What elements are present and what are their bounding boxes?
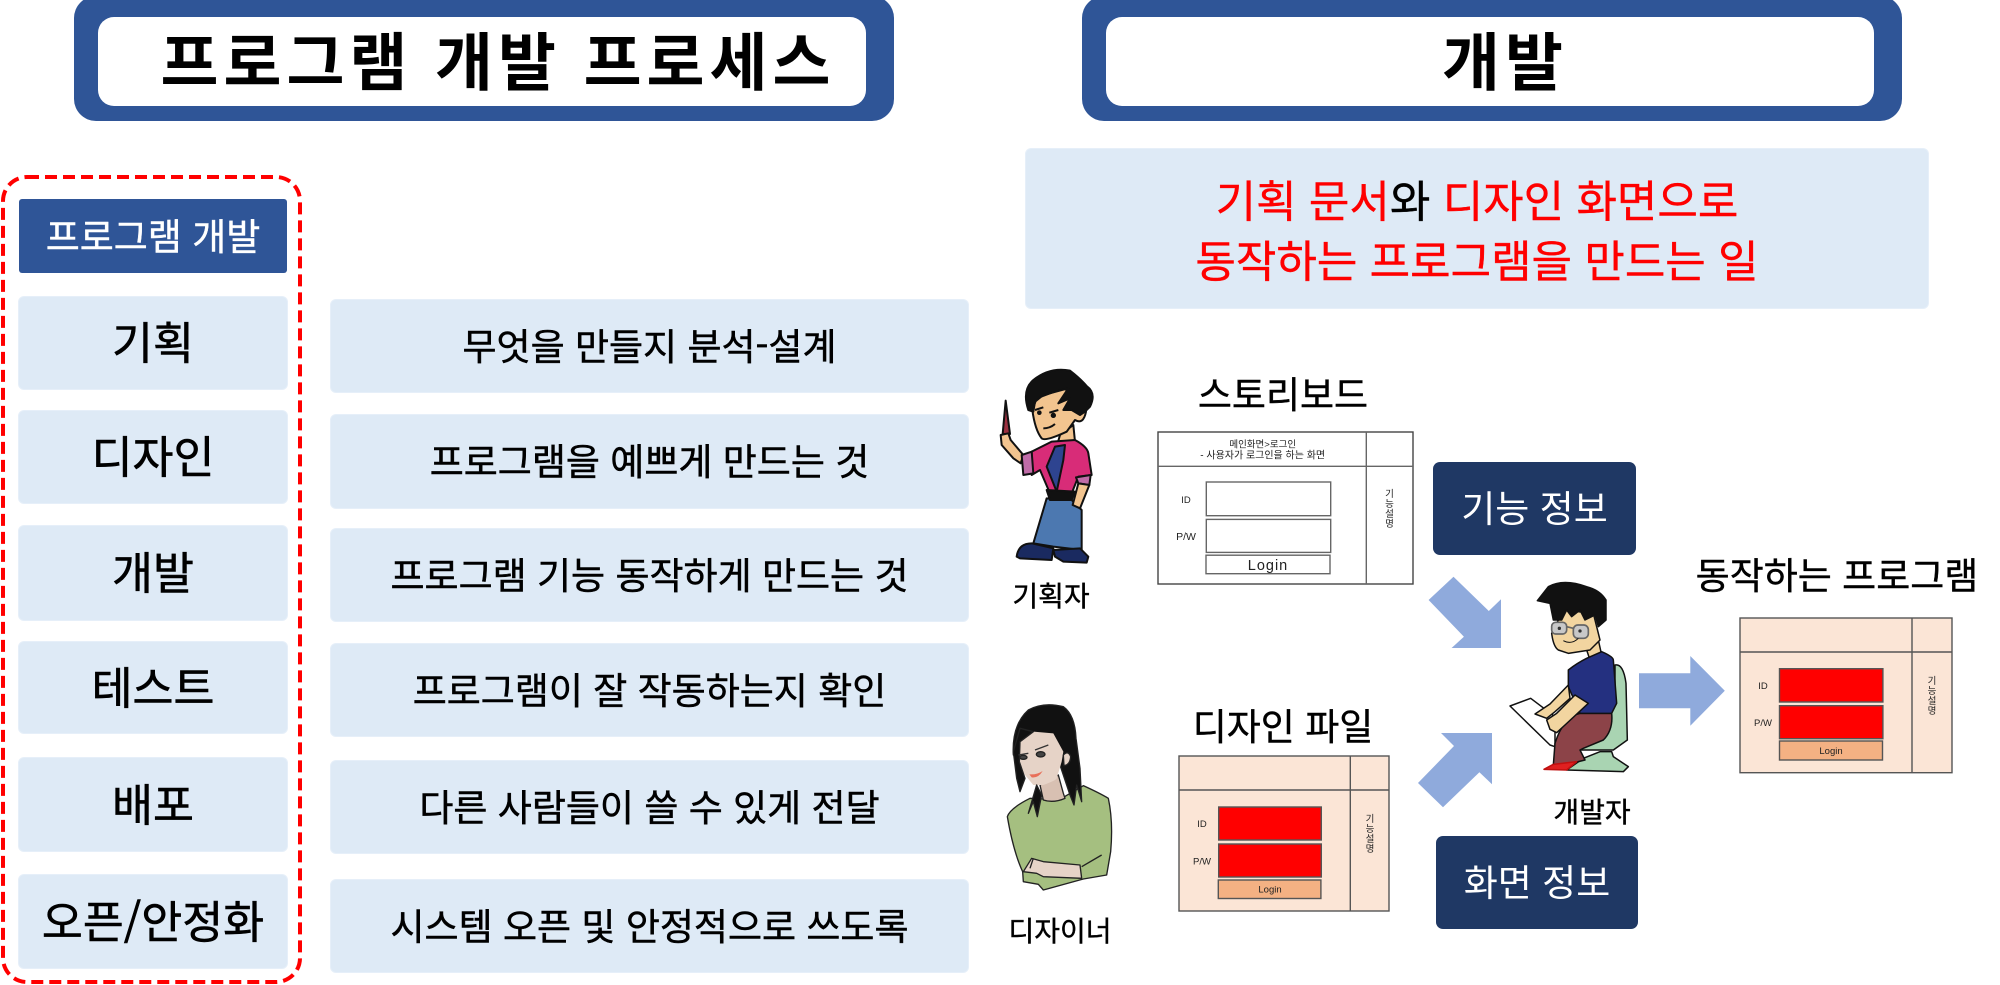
description: test <box>331 644 968 736</box>
header: program development: 프로그램 개발 <box>46 207 260 261</box>
icon: designer character <box>1006 704 1112 891</box>
box: feature information: 기능 정보 <box>1461 479 1608 533</box>
stage: deployment <box>19 758 287 851</box>
description: open and stabilize <box>331 880 968 972</box>
label: developer: 개발자 <box>1553 791 1631 831</box>
diagram: storyboard wireframe: P/W <box>1176 531 1196 543</box>
diagram: design file wireframe: 기 <box>1366 814 1374 825</box>
label: design file: 디자인 파일 <box>1193 697 1373 751</box>
header: program development <box>19 199 287 273</box>
diagram: design file wireframe: Login <box>1258 884 1282 896</box>
diagram: storyboard wireframe: 기 <box>1385 489 1394 500</box>
diagram: working program screen: 설 <box>1928 696 1936 707</box>
title: program development process: 프로그램 개발 프로세스 <box>161 13 835 104</box>
diagram: storyboard wireframe: 설 <box>1385 509 1394 520</box>
description: deployment <box>331 761 968 853</box>
title: development <box>1082 0 1902 121</box>
stage: planning <box>19 297 287 389</box>
callout: development definition: 동작하는 프로그램을 만드는 일 <box>1195 226 1759 290</box>
description: deployment: 다른 사람들이 쓸 수 있게 전달 <box>419 778 880 832</box>
diagram: storyboard wireframe: 메인화면>로그인 <box>1229 440 1296 450</box>
stage: development <box>19 526 287 620</box>
diagram: working program screen: Login <box>1819 746 1843 757</box>
diagram: design file wireframe: ID <box>1197 819 1207 830</box>
stage: test <box>19 642 287 733</box>
panel: stage list outlined in red dashes <box>1 175 302 984</box>
diagram: working program screen: 능 <box>1928 686 1937 697</box>
diagram: working program screen: P/W <box>1754 718 1772 729</box>
description: development: 프로그램 기능 동작하게 만드는 것 <box>390 546 908 600</box>
description: design: 프로그램을 예쁘게 만드는 것 <box>430 432 869 486</box>
box: screen information <box>1436 836 1638 929</box>
diagram: working program screen: 기 <box>1928 676 1936 687</box>
description: design <box>331 415 968 508</box>
callout: development definition: 기획 문서와 디자인 화면으로 <box>1216 166 1738 230</box>
stage: test: 테스트 <box>92 652 214 716</box>
icon: developer character <box>1509 582 1630 772</box>
diagram: storyboard wireframe: ID <box>1181 495 1191 506</box>
stage: design: 디자인 <box>92 421 214 486</box>
diagram: design file wireframe: 능 <box>1366 824 1375 835</box>
diagram: working program screen: 명 <box>1928 706 1936 717</box>
diagram: storyboard wireframe: 능 <box>1385 499 1394 510</box>
stage: open and stabilize <box>19 875 287 968</box>
title: development: 개발 <box>1442 13 1568 104</box>
description: open and stabilize: 시스템 오픈 및 안정적으로 쓰도록 <box>390 896 908 950</box>
description: test: 프로그램이 잘 작동하는지 확인 <box>413 660 886 714</box>
diagram: design file wireframe: 명 <box>1366 844 1374 855</box>
box: screen information: 화면 정보 <box>1464 853 1610 907</box>
label: planner: 기획자 <box>1012 575 1090 615</box>
stage: open and stabilize: 오픈/안정화 <box>42 886 264 950</box>
label: working program: 동작하는 프로그램 <box>1696 546 1978 600</box>
stage: development: 개발 <box>112 537 194 602</box>
description: development <box>331 529 968 621</box>
stage: deployment: 배포 <box>112 768 194 834</box>
diagram: design file wireframe: P/W <box>1193 856 1211 868</box>
diagram: storyboard wireframe: - 사용자가 로그인을 하는 화면 <box>1200 448 1325 462</box>
description: planning: 무엇을 만들지 분석-설계 <box>462 316 836 370</box>
stage: planning: 기획 <box>112 307 194 372</box>
diagram: storyboard wireframe: Login <box>1248 558 1288 574</box>
icon: planner character <box>1000 368 1094 564</box>
label: designer: 디자이너 <box>1008 910 1112 950</box>
diagram: working program screen: ID <box>1758 681 1768 692</box>
title: program development process <box>74 0 894 121</box>
stage: design <box>19 411 287 503</box>
diagram: design file wireframe: 설 <box>1366 834 1374 845</box>
diagram: storyboard wireframe: 명 <box>1385 519 1394 530</box>
box: feature information <box>1433 462 1636 555</box>
label: storyboard: 스토리보드 <box>1198 365 1368 419</box>
callout: development definition <box>1026 149 1928 308</box>
description: planning <box>331 300 968 392</box>
